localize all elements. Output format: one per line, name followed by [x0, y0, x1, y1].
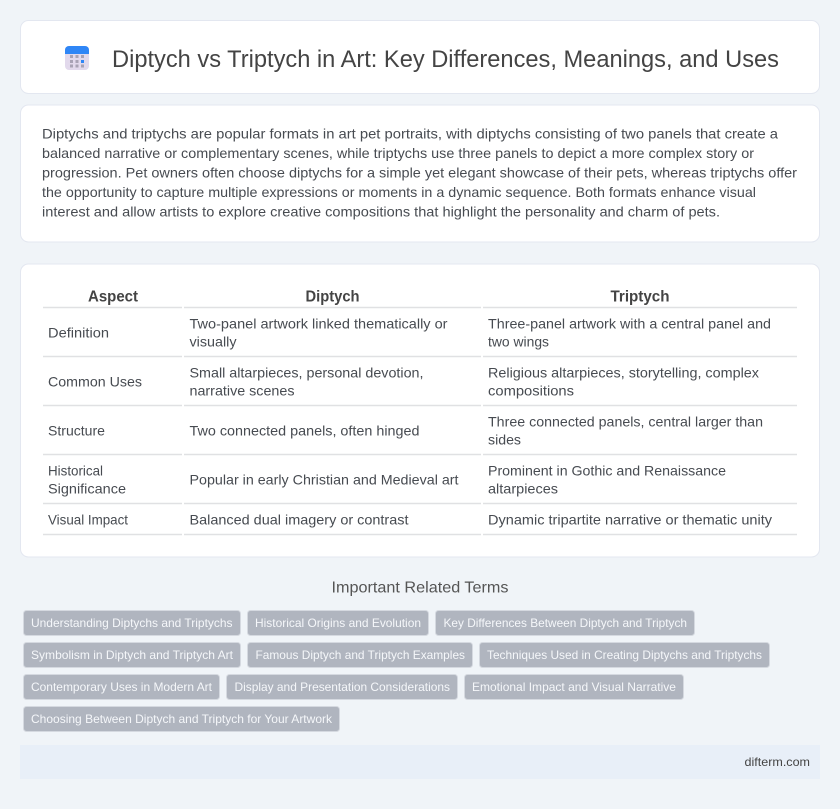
title: Diptych vs Triptych in Art: Key Differences, Meanings, and Uses — [112, 46, 779, 73]
tag: Emotional Impact and Visual Narrative — [472, 680, 676, 694]
table row: structure — [48, 414, 763, 448]
table row: historical significance — [48, 462, 726, 496]
tag — [436, 610, 694, 636]
tag: Historical Origins and Evolution — [255, 616, 421, 630]
intro paragraph: interest and allow artists to explore creative compositions that highlight the personality and charm of pets. — [42, 204, 720, 220]
table row: visual impact: Balanced dual imagery or contrast — [190, 512, 409, 528]
table row: common uses: narrative scenes — [190, 382, 294, 398]
table row: common uses: Small altarpieces, personal devotion, — [190, 364, 424, 380]
tag — [24, 674, 220, 700]
table row: definition: two wings — [488, 334, 549, 350]
table row: common uses — [48, 364, 759, 398]
table row: historical significance: Prominent in Gothic and Renaissance — [488, 462, 726, 478]
table row: visual impact: Dynamic tripartite narrative or thematic unity — [488, 512, 772, 528]
intro paragraph — [42, 126, 797, 220]
tag: Famous Diptych and Triptych Examples — [256, 648, 465, 662]
tag: Display and Presentation Considerations — [234, 680, 450, 694]
table row: common uses: Religious altarpieces, storytelling, complex — [488, 364, 759, 380]
icon: calendar — [65, 46, 89, 70]
table row: structure: Two connected panels, often hinged — [190, 422, 420, 438]
intro paragraph: progression. Pet owners often choose diptychs for a simple yet elegant showcase of their pets, whereas triptychs offer — [42, 164, 797, 180]
footer domain: difterm.com — [744, 755, 810, 769]
table row: historical significance: Historical — [48, 462, 103, 478]
intro paragraph: Diptychs and triptychs are popular formats in art pet portraits, with diptychs consisting of two panels that create a — [42, 126, 778, 142]
table row: definition: Definition — [48, 324, 109, 340]
tag — [464, 674, 684, 700]
table row: structure: Three connected panels, central larger than — [488, 414, 763, 430]
table row: definition — [48, 316, 771, 350]
tag — [24, 610, 240, 636]
table header: Aspect — [88, 288, 139, 306]
table row: definition: visually — [190, 334, 236, 350]
intro paragraph: the opportunity to capture multiple expressions or moments in a dynamic sequence. Both formats enhance visual — [42, 184, 756, 200]
intro paragraph: balanced narrative or complementary scenes, while triptychs use three panels to depict a more complex story or — [42, 145, 754, 161]
panel: comparison table — [20, 264, 820, 557]
table row: visual impact — [48, 512, 772, 528]
tag — [24, 642, 240, 668]
related terms tags — [24, 610, 770, 732]
tag — [248, 610, 428, 636]
table row: visual impact: Visual Impact — [48, 512, 128, 528]
tag: Techniques Used in Creating Diptychs and Triptychs — [487, 648, 762, 662]
heading: related terms: Important Related Terms — [332, 580, 508, 596]
table row: structure: sides — [488, 432, 521, 448]
tag: Understanding Diptychs and Triptychs — [31, 616, 232, 630]
table header: Diptych — [306, 288, 360, 306]
panel: introduction — [20, 105, 820, 242]
tag: Key Differences Between Diptych and Triptych — [444, 616, 687, 630]
tag: Symbolism in Diptych and Triptych Art — [31, 648, 234, 662]
tag: Choosing Between Diptych and Triptych for Your Artwork — [31, 712, 333, 726]
table row: historical significance: Significance — [48, 480, 126, 496]
table header: Triptych — [610, 288, 670, 306]
table row: structure: Structure — [48, 422, 105, 438]
table row: definition: Two-panel artwork linked thematically or — [190, 316, 448, 332]
tag — [480, 642, 770, 668]
tag: Contemporary Uses in Modern Art — [31, 680, 213, 694]
tag — [248, 642, 472, 668]
tag — [226, 674, 458, 700]
table header — [88, 288, 670, 306]
table row: common uses: Common Uses — [48, 374, 142, 390]
table row: common uses: compositions — [488, 382, 574, 398]
table row: definition: Three-panel artwork with a central panel and — [488, 316, 771, 332]
panel: header — [20, 20, 820, 94]
table row: historical significance: altarpieces — [488, 480, 558, 496]
table row: historical significance: Popular in early Christian and Medieval art — [190, 472, 459, 488]
footer — [20, 745, 820, 779]
tag — [24, 706, 340, 732]
